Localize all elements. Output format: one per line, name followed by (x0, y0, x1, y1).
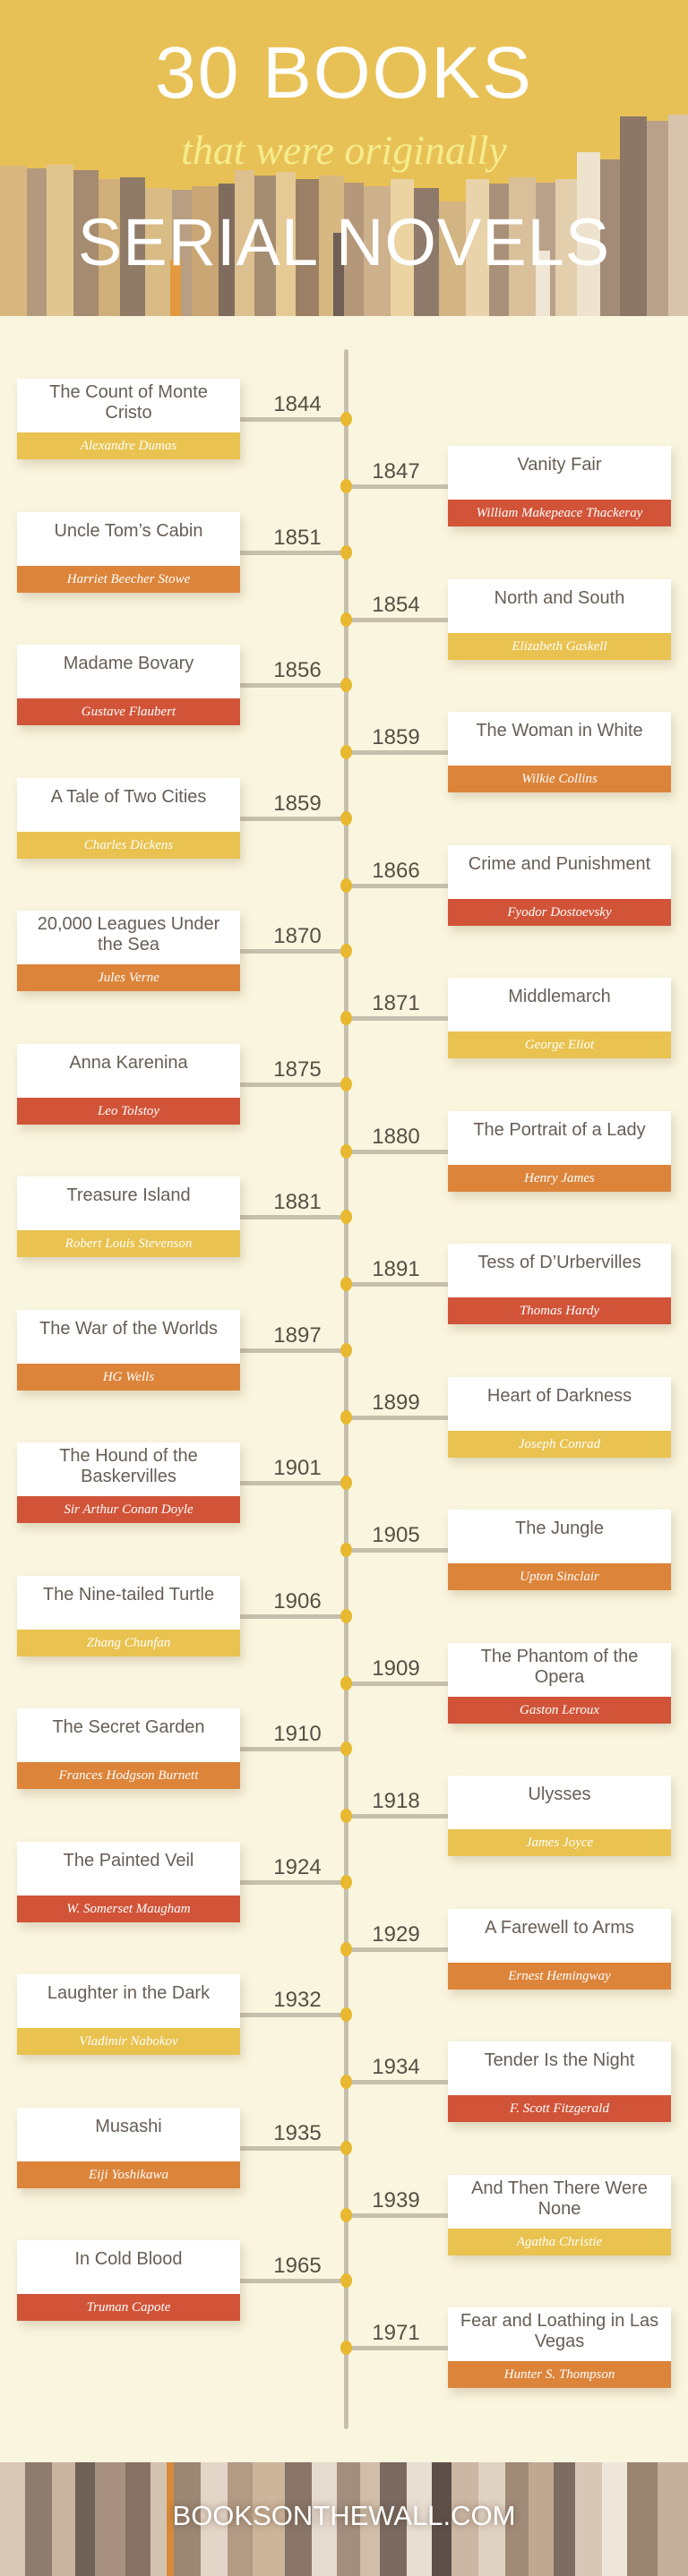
entry: 1971: 1971 (372, 2321, 420, 2345)
entry: 1870: 1870 (273, 924, 322, 948)
entry: 1871: 1871 (372, 991, 420, 1015)
entry: 1871: George Eliot (525, 1038, 594, 1052)
entry: 1844: The Count of Monte Cristo (49, 382, 208, 423)
entry: 1909: Gaston Leroux (520, 1703, 599, 1717)
entry: 1929: 1929 (372, 1922, 420, 1947)
entry: 1859 left (16, 778, 352, 868)
entry: 1875: Anna Karenina (69, 1053, 188, 1073)
entry: 1910 (16, 1708, 352, 1798)
entry: 1905: Upton Sinclair (520, 1570, 599, 1584)
entry: 1859 left: 1859 (273, 792, 322, 816)
entry: 1910: Frances Hodgson Burnett (59, 1768, 198, 1783)
entry: 1939 (340, 2175, 677, 2264)
entry: 1870 (16, 911, 352, 1000)
entry: 1866: 1866 (372, 859, 420, 883)
entry: 1897: 1897 (273, 1323, 322, 1348)
entry: 1847: Vanity Fair (517, 455, 602, 475)
footer book texture (0, 2462, 688, 2576)
entry: 1971 (340, 2307, 677, 2397)
entry: 1851: Harriet Beecher Stowe (67, 572, 190, 586)
entry: 1854: North and South (494, 588, 624, 608)
entry: 1924 (16, 1842, 352, 1931)
entry: 1905: 1905 (372, 1523, 420, 1547)
subtitle: that were originally: that were originally (181, 127, 507, 173)
entry: 1924: The Painted Veil (64, 1851, 194, 1870)
entry: 1965: In Cold Blood (74, 2249, 183, 2269)
entry: 1909: The Phantom of the Opera (481, 1647, 638, 1687)
entry: 1906: Zhang Chunfan (87, 1636, 170, 1650)
entry: 1880: 1880 (372, 1125, 420, 1149)
entry: 1897 (16, 1310, 352, 1399)
entry: 1844: Alexandre Dumas (81, 439, 176, 453)
entry: 1935: Musashi (95, 2117, 162, 2136)
entry: 1859 left: Charles Dickens (84, 838, 173, 852)
entry: 1871: Middlemarch (508, 987, 611, 1006)
entry: 1899 (340, 1377, 677, 1467)
entry: 1905: The Jungle (515, 1519, 604, 1538)
entry: 1866: Fyodor Dostoevsky (507, 905, 612, 920)
entry: 1859 right (340, 712, 677, 801)
entry: 1847: 1847 (372, 459, 420, 484)
entry: 1881: Robert Louis Stevenson (65, 1237, 192, 1251)
header book texture (0, 115, 688, 316)
entry: 1965 (16, 2240, 352, 2330)
entry: 1934: 1934 (372, 2055, 420, 2079)
entry: 1881: Treasure Island (66, 1185, 191, 1205)
entry: 1870: 20,000 Leagues Under the Sea (38, 914, 219, 954)
entry: 1847 (340, 446, 677, 535)
entry: 1866 (340, 845, 677, 935)
entry: 1880: Henry James (524, 1171, 595, 1185)
entry: 1934: F. Scott Fitzgerald (510, 2101, 609, 2116)
entry: 1844 (16, 379, 352, 468)
title: 30 BOOKS: 30 BOOKS (155, 32, 533, 114)
entry: 1899: Joseph Conrad (519, 1437, 600, 1451)
entry: 1906 (16, 1576, 352, 1665)
entry: 1906: 1906 (273, 1589, 322, 1613)
entry: 1875: 1875 (273, 1057, 322, 1082)
entry: 1854: Elizabeth Gaskell (512, 639, 607, 654)
entry: 1910: 1910 (273, 1722, 322, 1746)
entry: 1924: W. Somerset Maugham (66, 1902, 191, 1916)
entry: 1906: The Nine-tailed Turtle (43, 1585, 214, 1605)
title: SERIAL NOVELS: SERIAL NOVELS (78, 205, 610, 279)
entry: 1935: Eiji Yoshikawa (89, 2168, 168, 2182)
entry: 1897: The War of the Worlds (39, 1319, 218, 1339)
entry: 1851: 1851 (273, 526, 322, 550)
entry: 1918: 1918 (372, 1789, 420, 1813)
entry: 1939: And Then There Were None (471, 2178, 648, 2219)
entry: 1901: Sir Arthur Conan Doyle (64, 1502, 194, 1517)
entry: 1859 right: 1859 (372, 725, 420, 749)
entry: 1891: Tess of D’Urbervilles (477, 1253, 641, 1272)
entry: 1881: 1881 (273, 1190, 322, 1214)
entry: 1909 (340, 1643, 677, 1733)
entry: 1891: Thomas Hardy (520, 1304, 599, 1318)
entry: 1854 (340, 579, 677, 669)
entry: 1891 (340, 1244, 677, 1333)
entry: 1891: 1891 (372, 1257, 420, 1281)
entry: 1929: Ernest Hemingway (508, 1969, 611, 1983)
entry: 1934 (340, 2041, 677, 2131)
entry: 1901: The Hound of the Baskervilles (59, 1446, 198, 1486)
entry: 1939: 1939 (372, 2188, 420, 2212)
entry: 1932: 1932 (273, 1988, 322, 2012)
entry: 1870: Jules Verne (98, 971, 159, 985)
entry: 1935: 1935 (273, 2121, 322, 2145)
footer text: BOOKSONTHEWALL.COM (173, 2500, 515, 2531)
entry: 1875: Leo Tolstoy (98, 1104, 159, 1118)
entry: 1871 (340, 978, 677, 1067)
entry: 1851 (16, 512, 352, 602)
entry: 1918 (340, 1776, 677, 1865)
entry: 1880 (340, 1111, 677, 1201)
entry: 1929: A Farewell to Arms (485, 1918, 634, 1938)
entry: 1965: Truman Capote (87, 2300, 170, 2315)
entry: 1932 (16, 1974, 352, 2064)
entry: 1935 (16, 2108, 352, 2197)
entry: 1875 (16, 1044, 352, 1134)
entry: 1965: 1965 (273, 2254, 322, 2278)
entry: 1918: James Joyce (526, 1836, 593, 1850)
timeline spine (344, 349, 348, 2429)
entry: 1854: 1854 (372, 593, 420, 617)
entry: 1971: Hunter S. Thompson (504, 2367, 615, 2382)
entry: 1856: Gustave Flaubert (82, 705, 176, 719)
entry: 1880: The Portrait of a Lady (473, 1120, 646, 1140)
entry: 1901: 1901 (273, 1456, 322, 1480)
entry: 1856: 1856 (273, 658, 322, 682)
entry: 1899: 1899 (372, 1391, 420, 1415)
entry: 1881 (16, 1177, 352, 1266)
entry: 1934: Tender Is the Night (485, 2050, 634, 2070)
entry: 1905 (340, 1510, 677, 1599)
entry: 1856 (16, 645, 352, 734)
entry: 1851: Uncle Tom’s Cabin (54, 521, 202, 541)
entry: 1844: 1844 (273, 392, 322, 416)
entry: 1859 right: The Woman in White (476, 721, 643, 740)
entry: 1847: William Makepeace Thackeray (477, 506, 642, 520)
entry: 1932: Laughter in the Dark (47, 1983, 210, 2003)
header background (0, 0, 688, 316)
entry: 1859 right: Wilkie Collins (521, 772, 598, 786)
entry: 1856: Madame Bovary (64, 654, 194, 673)
entry: 1918: Ulysses (528, 1784, 591, 1804)
entry: 1929 (340, 1909, 677, 1998)
entry: 1901 (16, 1442, 352, 1532)
entry: 1924: 1924 (273, 1855, 322, 1879)
entry: 1897: HG Wells (103, 1370, 154, 1384)
entry: 1910: The Secret Garden (52, 1717, 205, 1737)
entry: 1932: Vladimir Nabokov (79, 2034, 178, 2049)
entry: 1909: 1909 (372, 1656, 420, 1681)
entry: 1939: Agatha Christie (517, 2235, 602, 2249)
entry: 1859 left: A Tale of Two Cities (51, 787, 206, 807)
entry: 1866: Crime and Punishment (469, 854, 650, 874)
entry: 1899: Heart of Darkness (487, 1386, 632, 1406)
entry: 1971: Fear and Loathing in Las Vegas (460, 2311, 658, 2351)
